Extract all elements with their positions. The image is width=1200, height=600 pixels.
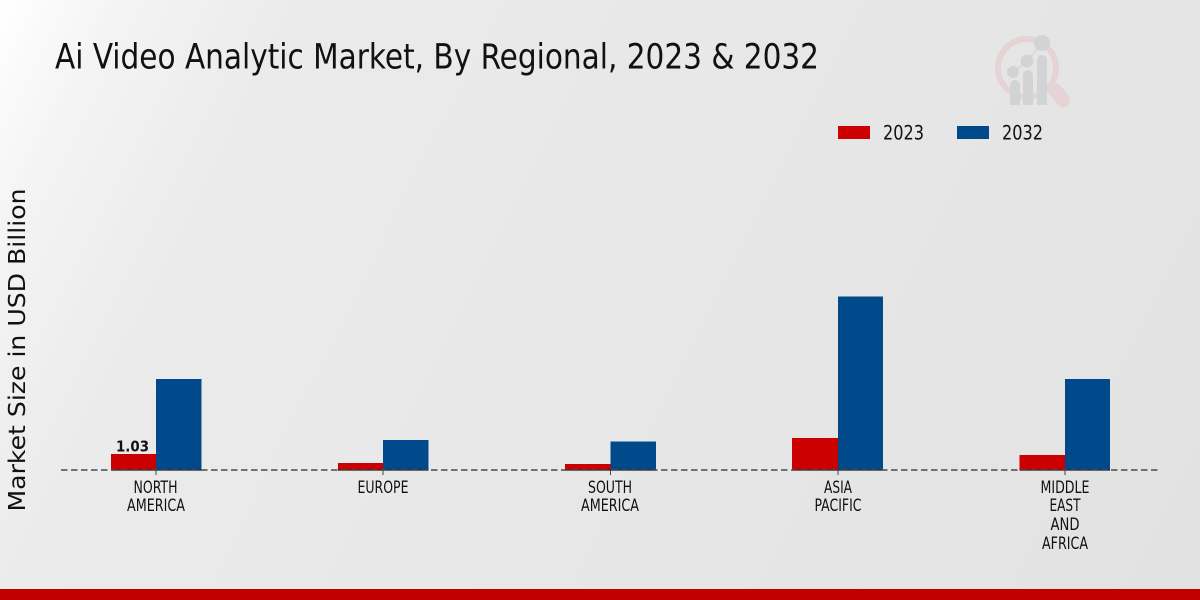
x axis label: Middle East and Africa: EAST (1050, 496, 1081, 515)
bottom bar (0, 589, 1200, 600)
x axis label: North America: AMERICA (127, 496, 186, 515)
x axis label: South America (581, 478, 640, 515)
x axis label: North America: NORTH (134, 478, 178, 497)
x axis label: South America: SOUTH (588, 478, 632, 497)
data label: 1.03 (116, 438, 149, 456)
x axis label: Middle East and Africa: MIDDLE (1040, 478, 1090, 497)
y axis title: Market Size in USD Billion (5, 188, 31, 512)
x axis label: South America: AMERICA (581, 496, 640, 515)
bar chart (61, 296, 1159, 475)
x axis label: Middle East and Africa: AND (1050, 515, 1080, 534)
icon: watermark logo (998, 35, 1063, 105)
x axis label: Middle East and Africa (1040, 478, 1090, 553)
x axis label: Asia Pacific: PACIFIC (814, 496, 862, 515)
legend item: 2032 (957, 122, 1043, 144)
legend item: 2032: 2032 (1002, 122, 1043, 144)
x axis label: Middle East and Africa: AFRICA (1042, 534, 1089, 553)
bars: Asia Pacific (792, 296, 883, 470)
legend (838, 122, 1043, 144)
bars: South America (565, 442, 656, 470)
x axis label: Asia Pacific: ASIA (824, 478, 853, 497)
x axis label: North America (127, 478, 186, 515)
legend item: 2023: 2023 (883, 122, 924, 144)
bars: Middle East and Africa (1020, 379, 1110, 470)
bars: Europe (338, 440, 428, 470)
bars: North America (111, 379, 202, 470)
x axis label: Europe: EUROPE (358, 478, 408, 497)
legend item: 2023 (838, 122, 924, 144)
x axis label: Asia Pacific (814, 478, 862, 515)
title: Ai Video Analytic Market, By Regional, 2023 & 2032 (55, 38, 819, 78)
